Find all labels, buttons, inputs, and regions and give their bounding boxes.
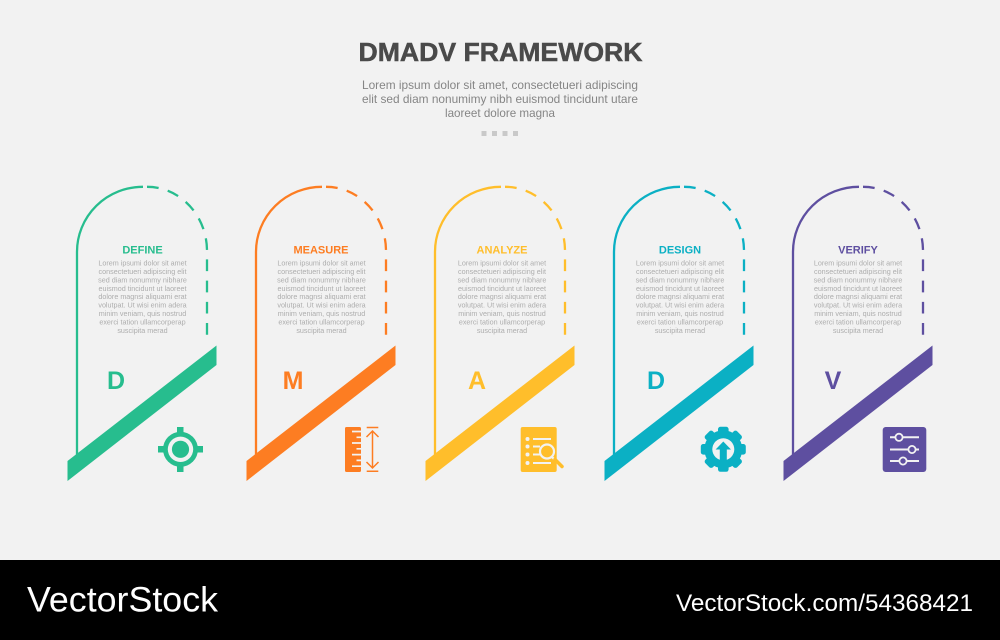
letter: V: [825, 367, 842, 395]
panel: design: [604, 187, 754, 481]
dashed arch outline: [863, 187, 923, 335]
heading: ANALYZE: [477, 244, 527, 256]
dashed arch outline: [147, 187, 207, 335]
body text: volutpat. Ut wisi enim adera: [458, 301, 546, 310]
icon: document with magnifier: [521, 427, 562, 472]
body text: Lorem ipsumi dolor sit amet: [458, 259, 546, 268]
body text: exerci tation ullamcorperap: [459, 317, 545, 326]
body text: euismod tincidunt ut laoreet: [458, 284, 546, 293]
body text: volutpat. Ut wisi enim adera: [277, 301, 366, 310]
body text: consectetueri adipiscing elit: [814, 267, 902, 276]
body text: sed diam nonummy nibhare: [814, 275, 902, 284]
subtitle text block: laoreet dolore magna: [445, 106, 555, 120]
body text: sed diam nonummy nibhare: [458, 275, 546, 284]
body text: volutpat. Ut wisi enim adera: [98, 301, 187, 310]
body text: dolore magnsi aliquami erat: [458, 292, 546, 301]
diagonal band: [426, 346, 574, 481]
body text: sed diam nonummy nibhare: [636, 275, 724, 284]
footer logo text: VectorStock: [27, 580, 219, 620]
heading: DESIGN: [659, 244, 701, 256]
icon: gear with up arrow: [701, 427, 746, 472]
body text: Lorem ipsumi dolor sit amet: [277, 259, 366, 268]
panel: verify: [784, 187, 932, 481]
letter: M: [283, 367, 303, 395]
subtitle text block: Lorem ipsum dolor sit amet, consectetueri adipiscing: [362, 78, 638, 92]
body text: consectetueri adipiscing elit: [458, 267, 546, 276]
icon: target: [158, 427, 203, 472]
watermark footer band: [0, 560, 1000, 640]
diagonal band: [68, 346, 216, 481]
body text: minim veniam, quis nostrud: [636, 309, 724, 318]
body text: consectetueri adipiscing elit: [636, 267, 724, 276]
body text: euismod tincidunt ut laoreet: [99, 284, 186, 293]
body text: consectetueri adipiscing elit: [278, 267, 365, 276]
dashed arch outline: [684, 187, 744, 335]
letter: D: [107, 367, 125, 395]
body text: Lorem ipsumi dolor sit amet: [814, 259, 902, 268]
body text: exerci tation ullamcorperap: [637, 317, 723, 326]
icon: ruler and height arrow: [345, 427, 378, 472]
body text: dolore magnsi aliquami erat: [277, 292, 366, 301]
body text: dolore magnsi aliquami erat: [814, 292, 902, 301]
panel: define: [68, 187, 216, 481]
solid arch outline: [256, 187, 322, 456]
body text: dolore magnsi aliquami erat: [636, 292, 724, 301]
body text: suscipita merad: [477, 326, 527, 335]
body text: sed diam nonummy nibhare: [98, 275, 187, 284]
body text: sed diam nonummy nibhare: [277, 275, 366, 284]
body text: suscipita merad: [117, 326, 168, 335]
body text: Lorem ipsumi dolor sit amet: [636, 259, 724, 268]
title: DMADV FRAMEWORK: [358, 37, 643, 67]
body text: euismod tincidunt ut laoreet: [278, 284, 365, 293]
body text: Lorem ipsumi dolor sit amet: [98, 259, 187, 268]
body text: suscipita merad: [833, 326, 883, 335]
body text: suscipita merad: [655, 326, 705, 335]
body text: volutpat. Ut wisi enim adera: [814, 301, 902, 310]
subtitle text block: elit sed diam nonumimy nibh euismod tincidunt utare: [362, 92, 638, 106]
body text: minim veniam, quis nostrud: [99, 309, 186, 318]
body text: minim veniam, quis nostrud: [458, 309, 546, 318]
body text: volutpat. Ut wisi enim adera: [636, 301, 724, 310]
subtitle text block: [362, 78, 638, 120]
pagination dots: [482, 131, 518, 136]
diagonal band: [604, 346, 754, 481]
letter: A: [468, 367, 486, 395]
body text: euismod tincidunt ut laoreet: [814, 284, 902, 293]
diagonal band: [784, 346, 932, 481]
body text: euismod tincidunt ut laoreet: [636, 284, 724, 293]
body text: minim veniam, quis nostrud: [278, 309, 365, 318]
body text: dolore magnsi aliquami erat: [98, 292, 187, 301]
body text: minim veniam, quis nostrud: [814, 309, 902, 318]
heading: VERIFY: [838, 244, 879, 256]
body text: exerci tation ullamcorperap: [815, 317, 901, 326]
solid arch outline: [77, 187, 143, 456]
body text: suscipita merad: [296, 326, 347, 335]
panel: measure: [246, 187, 396, 481]
heading: DEFINE: [122, 244, 163, 256]
body text: consectetueri adipiscing elit: [99, 267, 186, 276]
solid arch outline: [435, 187, 501, 456]
diagonal band: [246, 346, 396, 481]
letter: D: [647, 367, 665, 395]
solid arch outline: [793, 187, 859, 456]
panel: analyze: [426, 187, 574, 481]
solid arch outline: [614, 187, 680, 456]
body text: exerci tation ullamcorperap: [278, 317, 365, 326]
heading: MEASURE: [293, 244, 349, 256]
footer image id: VectorStock.com/54368421: [676, 590, 973, 617]
body text: exerci tation ullamcorperap: [99, 317, 186, 326]
dashed arch outline: [326, 187, 386, 335]
icon: sliders: [883, 427, 926, 472]
dashed arch outline: [505, 187, 565, 335]
